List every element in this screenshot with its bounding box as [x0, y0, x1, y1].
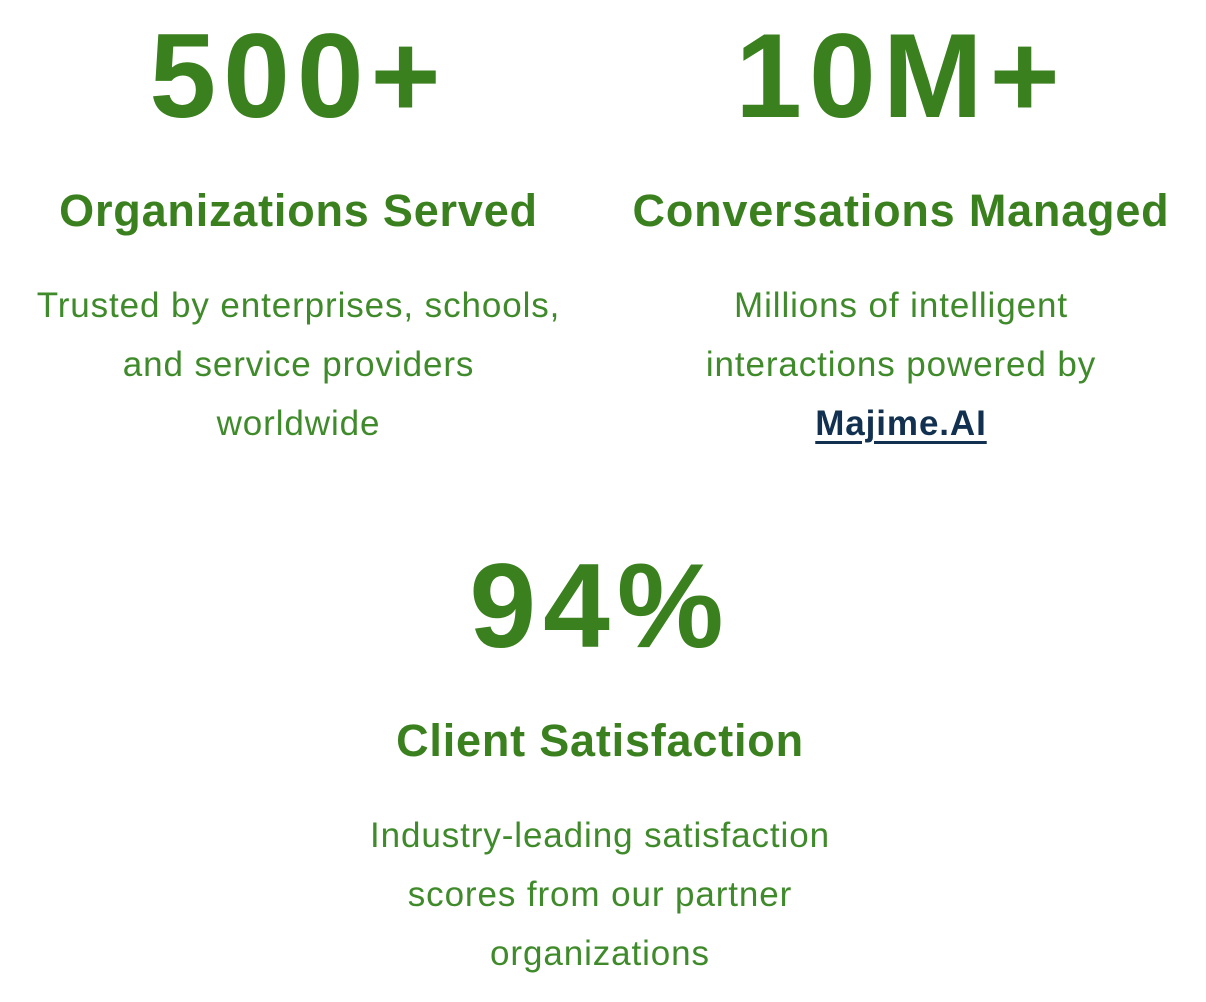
description: scores from our partner [408, 875, 792, 914]
description: Trusted by enterprises, schools, [37, 286, 560, 325]
stat: client satisfaction [370, 539, 830, 973]
description [37, 286, 560, 443]
description: and service providers [123, 345, 474, 384]
description: Industry-leading satisfaction [370, 816, 830, 855]
description [370, 816, 830, 973]
heading: Client Satisfaction: Client Satisfaction [396, 715, 804, 766]
stat: organizations served [37, 9, 560, 443]
number: 500+: 500+ [149, 9, 448, 143]
description [706, 286, 1096, 444]
description: worldwide [217, 404, 380, 443]
description: Millions of intelligent [734, 286, 1068, 325]
description: organizations [490, 934, 710, 973]
number: 94%: 94% [469, 539, 731, 673]
stat: conversations managed [633, 9, 1169, 444]
heading: Conversations Managed: Conversations Managed [633, 185, 1169, 236]
description: interactions powered by [706, 345, 1096, 384]
heading: Organizations Served: Organizations Served [59, 185, 538, 236]
description: Majime.AI [815, 404, 987, 443]
number: 10M+: 10M+ [735, 9, 1067, 143]
